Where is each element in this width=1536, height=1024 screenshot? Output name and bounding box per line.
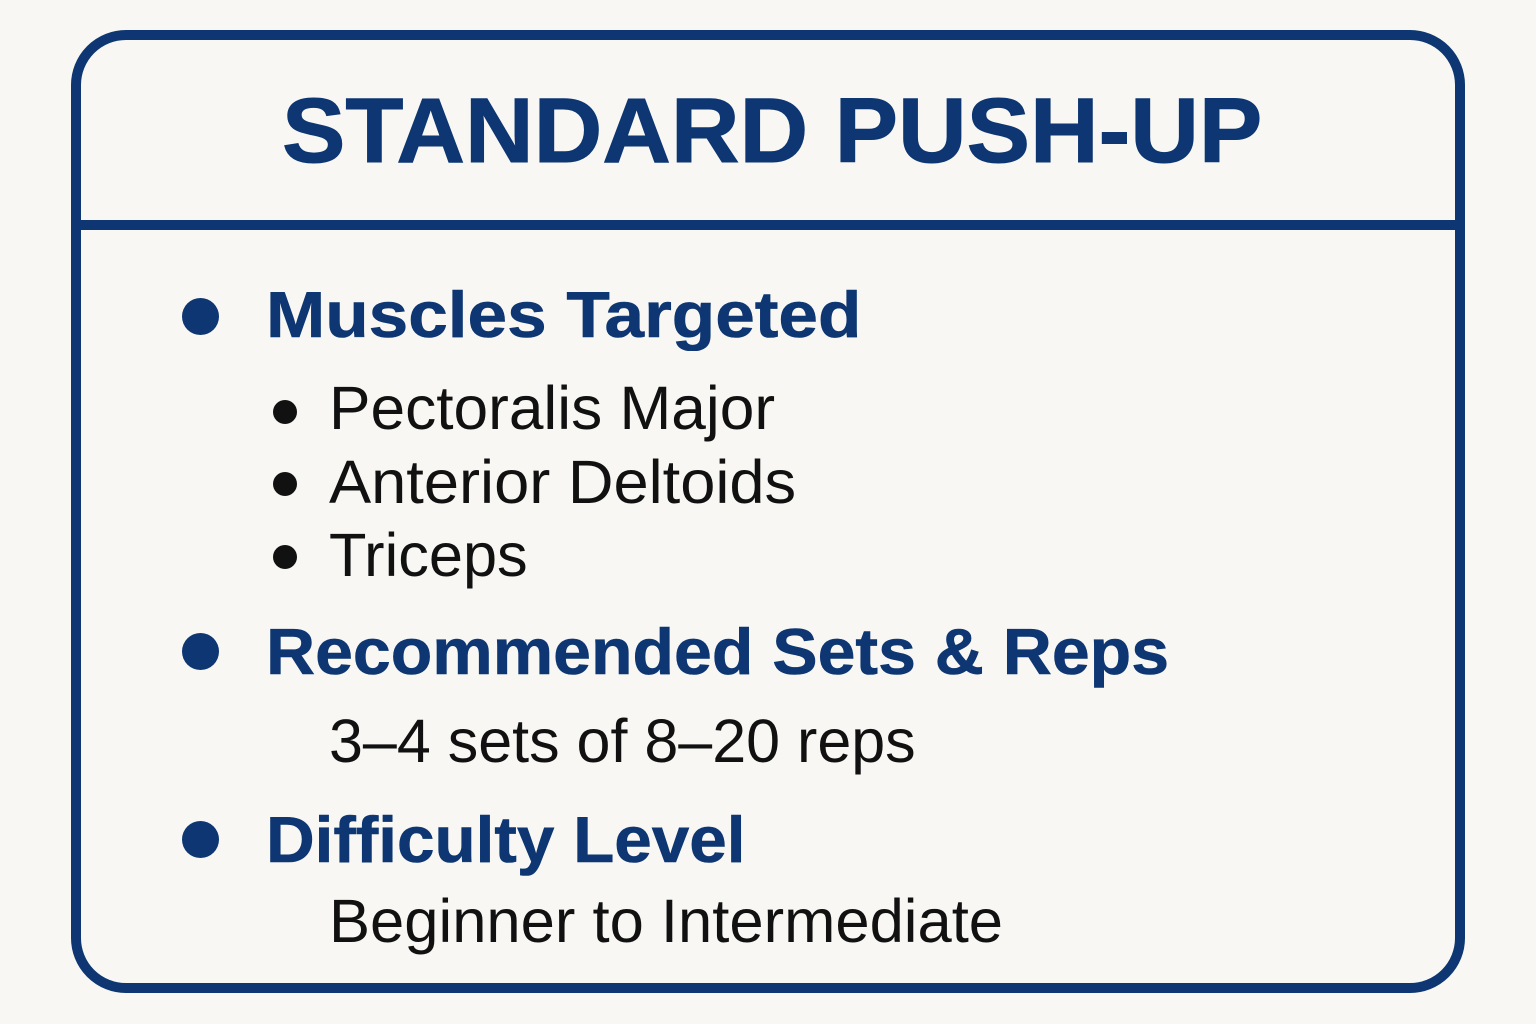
- bullet: [273, 472, 297, 496]
- text: triceps: Triceps: [329, 521, 528, 589]
- text: anterior deltoids: Anterior Deltoids: [329, 448, 796, 516]
- icon: bullet: [182, 821, 219, 858]
- heading: muscles targeted: Muscles Targeted: [266, 278, 861, 351]
- section: sets and reps: [182, 615, 1169, 775]
- text: difficulty value: Beginner to Intermediate: [329, 887, 1003, 955]
- icon: bullet: [182, 298, 219, 335]
- section: muscles targeted: [182, 278, 861, 589]
- section: difficulty level: [182, 803, 1003, 955]
- title: STANDARD PUSH-UP: [282, 80, 1262, 182]
- text: pectoralis major: Pectoralis Major: [329, 374, 775, 442]
- text: sets and reps: 3–4 sets of 8–20 reps: [329, 707, 916, 775]
- bullet: [273, 400, 297, 424]
- icon: bullet: [182, 633, 219, 670]
- bullet: [273, 545, 297, 569]
- heading: difficulty level: Difficulty Level: [266, 803, 745, 876]
- header divider: [76, 220, 1460, 230]
- heading: recommended sets and reps: Recommended Sets & Reps: [266, 615, 1169, 688]
